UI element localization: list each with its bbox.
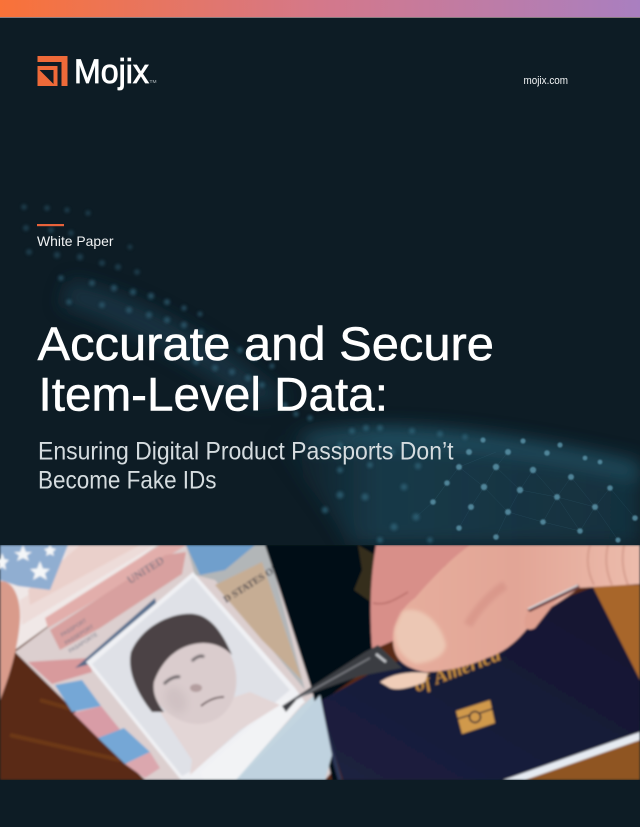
title: Accurate and Secure xyxy=(38,317,494,370)
wood table xyxy=(0,582,640,780)
subtitle: Become Fake IDs xyxy=(38,466,216,494)
subtitle xyxy=(38,438,454,494)
icon: stars xyxy=(0,545,56,580)
passport inner page: UNITED xyxy=(125,555,166,587)
title xyxy=(38,317,494,420)
eyes, nose and mouth xyxy=(164,656,204,684)
logo: TM xyxy=(150,79,157,84)
tweezers xyxy=(282,584,580,712)
thumb nail xyxy=(395,610,446,664)
mesh dots lower right xyxy=(430,437,638,543)
website url: mojix.com xyxy=(524,75,568,87)
mesh lines xyxy=(416,452,635,540)
label: white paper: White Paper xyxy=(37,233,114,249)
glow: mesh ribbon xyxy=(60,280,640,545)
visa data panel xyxy=(186,545,305,690)
upper left dots xyxy=(21,204,140,275)
logo xyxy=(38,53,157,91)
hair xyxy=(130,614,232,712)
top gradient bar xyxy=(0,0,640,18)
icon: Mojix square mark xyxy=(38,56,68,86)
face xyxy=(152,642,237,723)
title: Item-Level Data: xyxy=(38,368,388,420)
white card edge xyxy=(206,706,300,780)
subtitle: Ensuring Digital Product Passports Don’t xyxy=(38,438,454,466)
background dot mesh wave xyxy=(21,204,640,545)
left finger xyxy=(0,581,20,700)
black passport underlay xyxy=(265,545,380,780)
id photo card xyxy=(86,572,332,780)
passport inner page: PASSEPORT xyxy=(64,624,96,647)
gold embroidery xyxy=(354,545,375,605)
neck xyxy=(160,692,280,775)
engraving xyxy=(75,598,158,668)
passport inner page: PASSPORT xyxy=(60,618,89,639)
navy passport xyxy=(318,587,640,780)
pink stripes xyxy=(45,545,186,628)
passport lettering: of America xyxy=(411,644,504,697)
passport inner page xyxy=(15,545,335,780)
passport inner page: PASAPORTE xyxy=(68,632,99,655)
accent rule xyxy=(37,224,64,226)
flag xyxy=(0,545,158,650)
photo: passport being tampered with xyxy=(0,545,640,780)
wordmark: Mojix xyxy=(74,53,149,91)
passport inner page: D STATES OF xyxy=(222,563,281,606)
shirt xyxy=(314,693,334,766)
hand xyxy=(371,545,640,689)
icon: gold biometric chip xyxy=(456,700,495,734)
